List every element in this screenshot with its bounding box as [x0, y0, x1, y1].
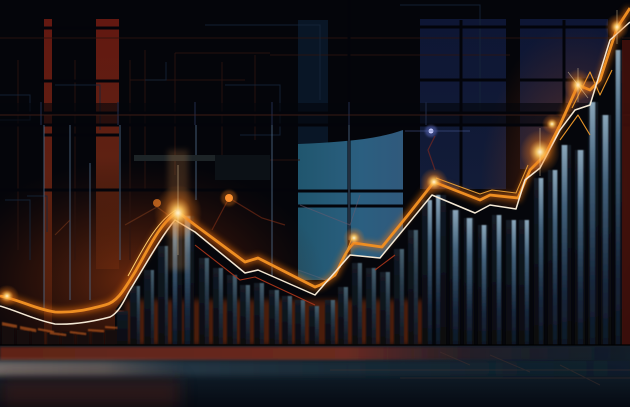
background grid: [0, 0, 630, 310]
panel: red columns: [44, 19, 119, 349]
orange ambient glow left: [0, 160, 325, 400]
panel: teal curved screen: [298, 130, 403, 280]
dark backing under the line: [115, 30, 622, 345]
chart line: white main: [0, 22, 630, 324]
secondary faint chart lines: [55, 195, 360, 285]
orange ambient glow right: [480, 25, 630, 355]
warm glow between bars: [125, 300, 425, 345]
chart line: thin red under: [195, 245, 395, 305]
chart line: orange glow: [0, 8, 630, 312]
flares: [0, 10, 629, 307]
red edge at right: [622, 40, 630, 350]
floor: [0, 345, 630, 407]
panel: navy windows: [298, 19, 608, 189]
tall bar bodies: [117, 50, 623, 345]
bar highlights: [137, 230, 418, 345]
chart line: orange main: [0, 8, 630, 312]
bar chart: dark steel columns: [2, 50, 623, 345]
left short bars: [2, 310, 125, 345]
dots: background nodes: [153, 125, 470, 207]
